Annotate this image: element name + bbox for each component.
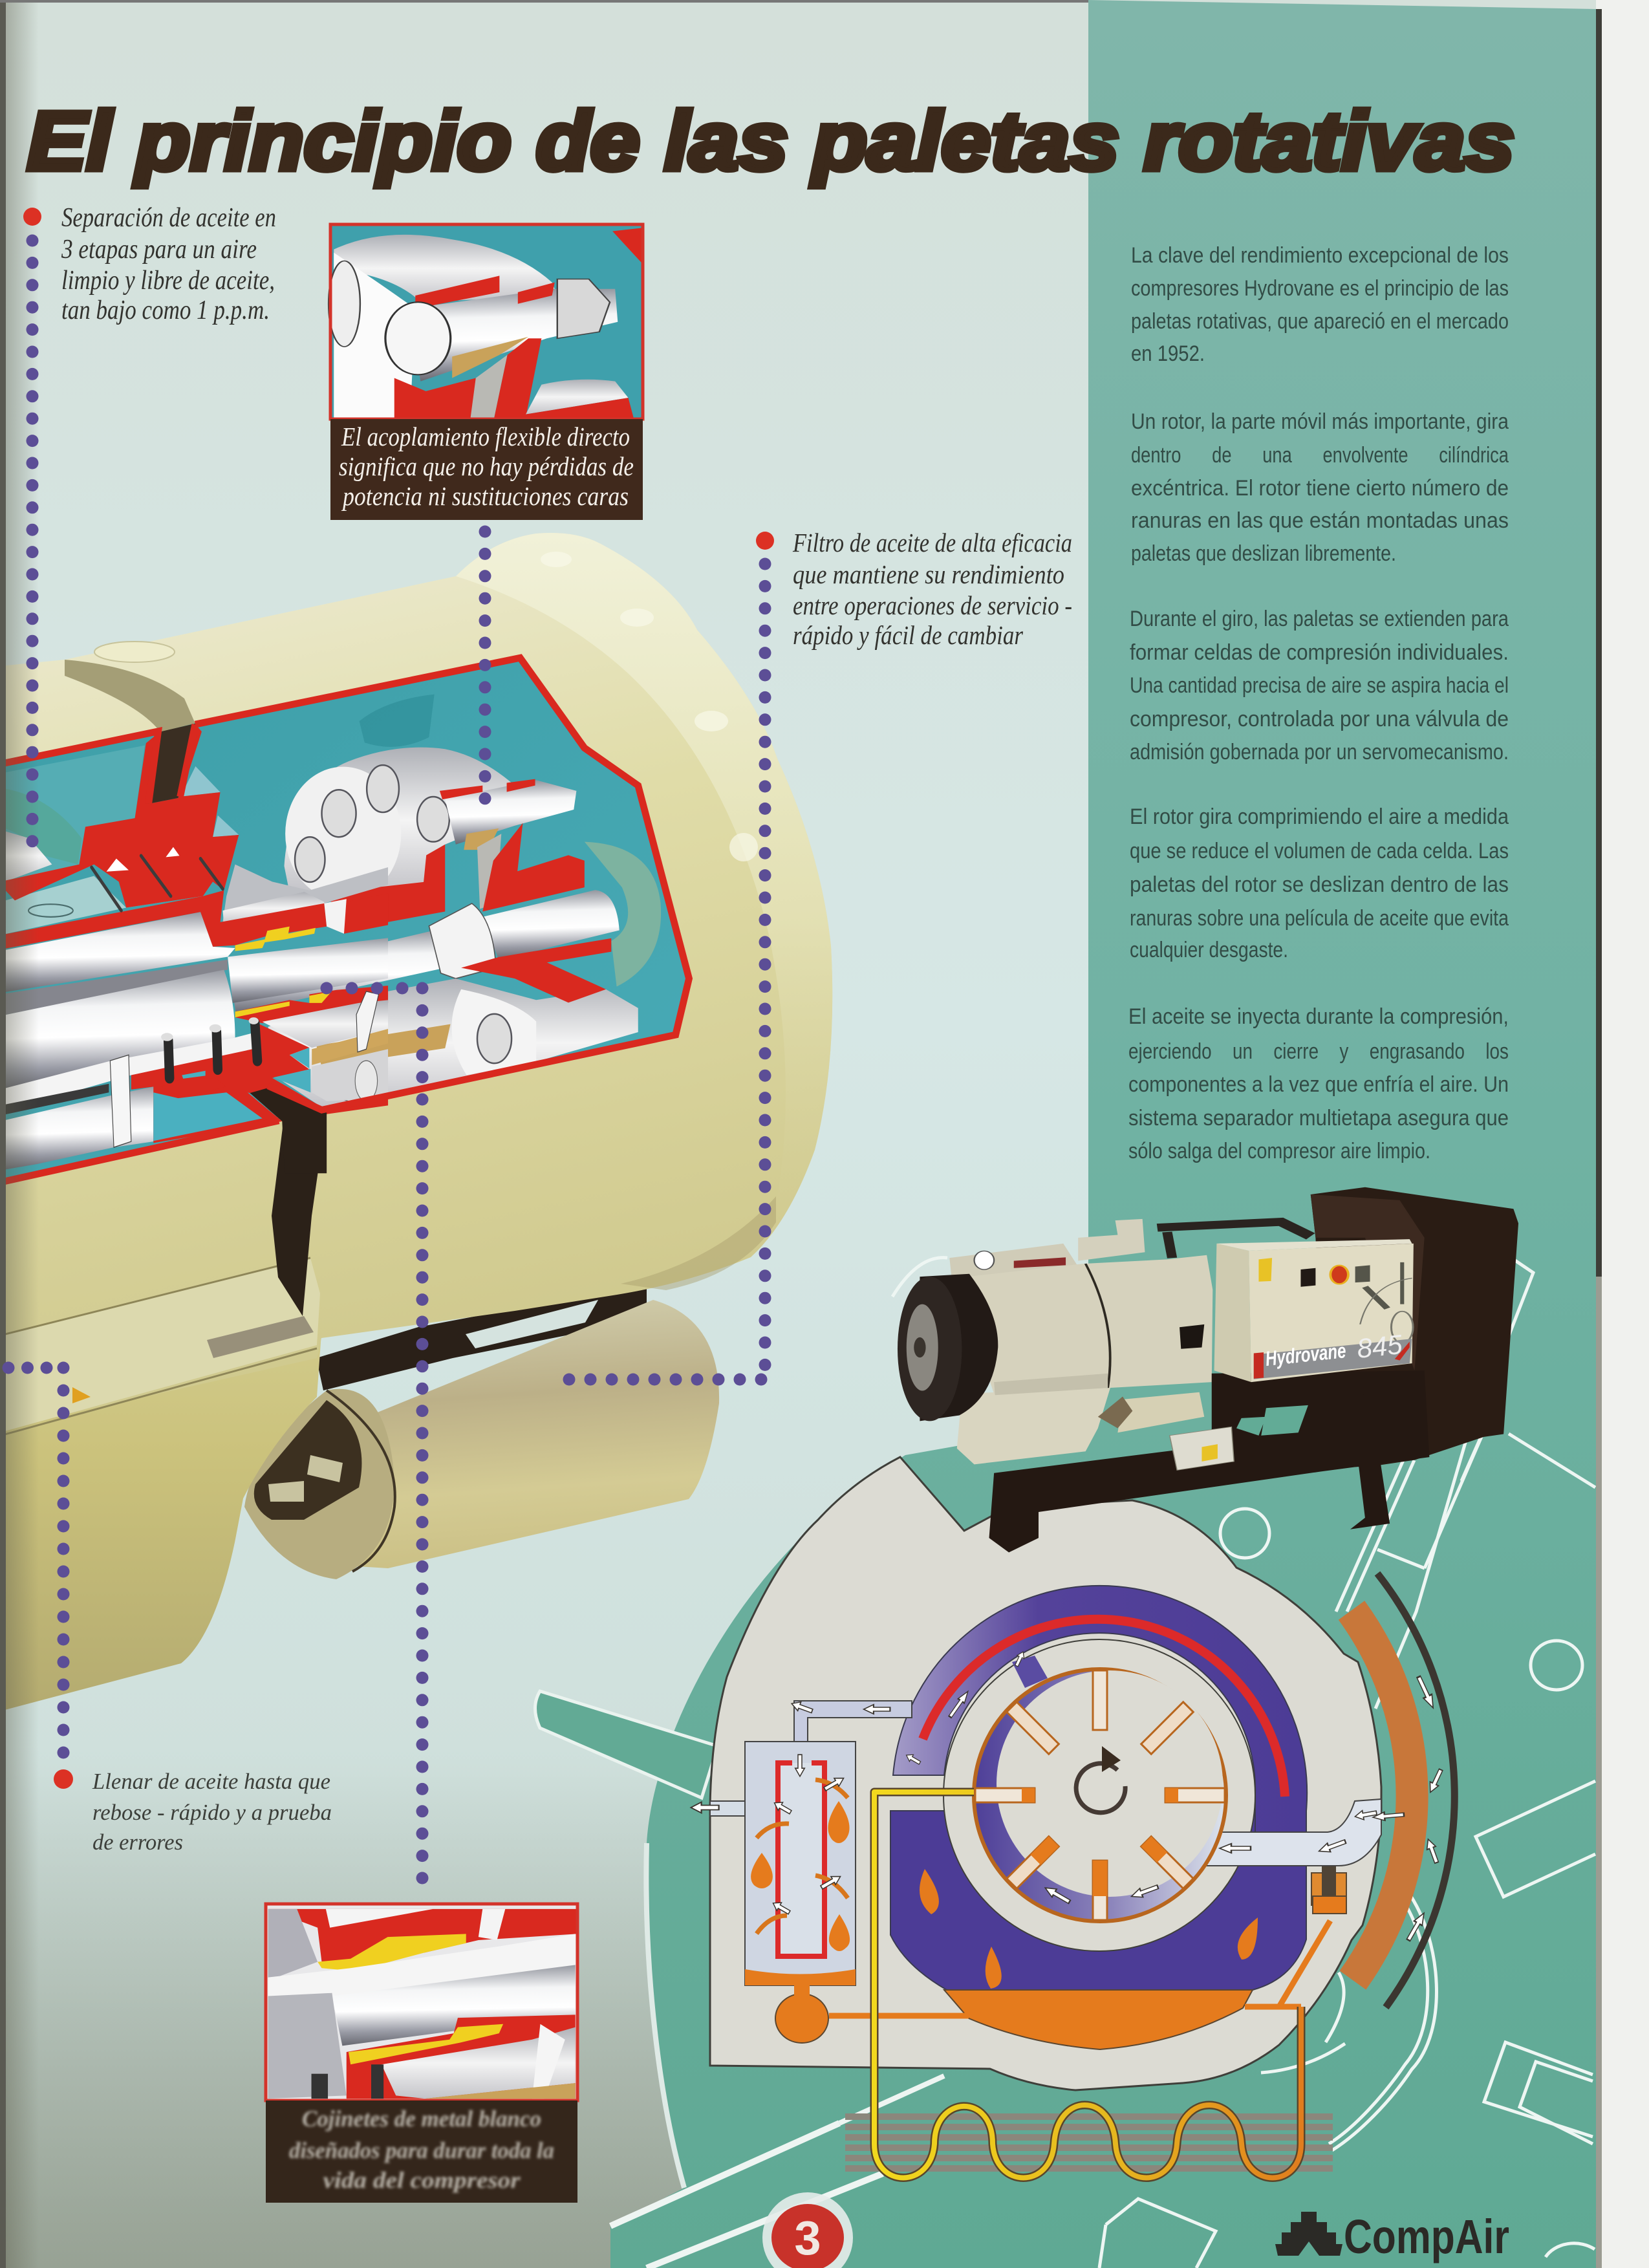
inlet pipe	[1199, 1799, 1381, 1866]
gauge panel	[949, 1244, 1078, 1281]
big shafts	[0, 912, 235, 993]
separator vessel	[710, 1701, 912, 2043]
callout: oil separation: 3 etapas para un aire	[61, 235, 257, 265]
body text: Un rotor, la parte móvil más importante, gira	[1131, 409, 1509, 434]
cooler fins	[845, 2113, 1333, 2172]
callout: oil separation: Separación de aceite en	[61, 203, 276, 233]
callout: oil filling	[54, 1769, 332, 1855]
body text: ranuras sobre una película de aceite que evita	[1130, 906, 1509, 931]
panel: white metal bearings detail: diseñados para durar toda la	[289, 2137, 554, 2163]
brand label text: Hydrovane	[1264, 1339, 1347, 1370]
callout: oil filling: rebose - rápido y a prueba	[92, 1800, 332, 1825]
callout: oil filter: que mantiene su rendimiento	[793, 559, 1064, 589]
lower tank	[957, 1388, 1110, 1464]
callout: oil filter: entre operaciones de servicio -	[793, 590, 1072, 620]
main body	[0, 533, 832, 1429]
radiator	[1311, 1187, 1518, 1469]
callout: oil separation: limpio y libre de aceite,	[61, 266, 275, 296]
black filter pad	[609, 978, 721, 1103]
body text: componentes a la vez que enfría el aire. Un	[1128, 1072, 1509, 1097]
flange head	[284, 748, 536, 892]
oil filter	[1311, 1866, 1346, 1914]
callout: oil filling: Llenar de aceite hasta que	[92, 1769, 330, 1794]
page number	[762, 2192, 853, 2268]
illustration: cutaway compressor housing	[0, 533, 832, 1711]
body text: sólo salga del compresor aire limpio.	[1128, 1139, 1430, 1163]
body text: paletas rotativas, que apareció en el mercado	[1131, 309, 1509, 334]
lower strips	[0, 1032, 257, 1112]
body text: dentro de una envolvente cilíndrica	[1131, 443, 1509, 468]
air/oil ring	[890, 1586, 1307, 1990]
lower tank	[0, 1196, 323, 1711]
central red block	[0, 724, 239, 908]
outer orange band	[1352, 1610, 1412, 1980]
page number: 3	[794, 2211, 821, 2265]
body text: El rotor gira comprimiendo el aire a medida	[1130, 805, 1509, 829]
teal text panel	[1088, 0, 1596, 2268]
cutaway interior: left chamber and main shafts	[0, 724, 388, 1173]
callout: oil filter: Filtro de aceite de alta eficacia	[792, 528, 1072, 557]
callout: oil separation: tan bajo como 1 p.p.m.	[61, 296, 270, 325]
base frame	[989, 1370, 1429, 1552]
body text: La clave del rendimiento excepcional de los	[1131, 243, 1509, 268]
compressor unit photo	[898, 1187, 1518, 1552]
shafts	[231, 930, 445, 1013]
body text: ejerciendo un cierre y engrasando los	[1128, 1039, 1509, 1064]
oil circuit diagram	[691, 1457, 1454, 2178]
red section outline	[0, 658, 689, 1182]
panel: white metal bearings detail: Cojinetes de metal blanco	[302, 2106, 541, 2132]
oil drops	[751, 1801, 1258, 1989]
small oil filter cylinder	[244, 1287, 719, 1579]
body text: excéntrica. El rotor tiene cierto número de	[1131, 476, 1509, 501]
lower coupling	[268, 978, 638, 1107]
oil return lines	[829, 1921, 1330, 2016]
rotor	[974, 1669, 1226, 1921]
oil sump	[944, 1990, 1253, 2049]
cutaway interior: right chamber	[0, 658, 689, 1182]
body text: compresor, controlada por una válvula de	[1130, 707, 1509, 731]
panel: flexible coupling detail: El acoplamiento flexible directo	[341, 422, 630, 451]
flange highlight	[456, 533, 832, 1235]
flow arrows	[691, 1650, 1445, 1942]
panel: flexible coupling detail: potencia ni sustituciones caras	[341, 481, 629, 511]
motor body	[954, 1255, 1212, 1394]
body text: ranuras en las que están montadas unas	[1131, 508, 1509, 533]
panel: flexible coupling detail	[329, 224, 643, 520]
callout: oil filter	[756, 528, 1072, 650]
body text: compresores Hydrovane es el principio de las	[1131, 276, 1509, 301]
body text: en 1952.	[1131, 341, 1205, 366]
flywheel	[920, 1274, 998, 1421]
pipe	[1158, 1222, 1311, 1237]
dotted leader lines	[8, 241, 765, 1896]
body text: Durante el giro, las paletas se extienden para	[1130, 607, 1509, 631]
bottom page shading	[0, 1746, 1088, 2268]
seam band on tank	[0, 1258, 320, 1432]
section seams	[149, 724, 195, 804]
body text: sistema separador multietapa asegura que	[1128, 1106, 1509, 1130]
right page margin	[1596, 0, 1649, 2268]
lower dark seam	[272, 1112, 327, 1316]
title: El principio de las paletas rotativas	[27, 95, 1514, 188]
body text: Una cantidad precisa de aire se aspira hacia el	[1130, 673, 1509, 698]
housing	[710, 1457, 1381, 2090]
panel: white metal bearings detail	[266, 1904, 577, 2203]
outer black band	[1377, 1573, 1454, 2007]
CompAir logo	[1275, 2210, 1509, 2263]
warning box	[1170, 1427, 1234, 1470]
compressor unit photo: 845	[1355, 1329, 1404, 1364]
coupling	[445, 780, 576, 845]
body text: que se reduce el volumen de cada celda. Las	[1130, 839, 1509, 863]
CompAir logo: CompAir	[1344, 2210, 1509, 2263]
panel: white metal bearings detail: vida del compresor	[323, 2167, 521, 2193]
callout: oil separation	[23, 203, 276, 325]
body text: paletas del rotor se deslizan dentro de las	[1130, 872, 1509, 897]
background: teal gear disc and white line pattern	[535, 1258, 1595, 2268]
cooling coil	[874, 1792, 1301, 2178]
panel: flexible coupling detail: significa que no hay pérdidas de	[339, 451, 634, 481]
callout: oil filter: rápido y fácil de cambiar	[793, 620, 1024, 650]
body text: formar celdas de compresión individuales.	[1130, 640, 1509, 665]
callout: oil filling: de errores	[92, 1830, 183, 1855]
body text: admisión gobernada por un servomecanismo.	[1130, 740, 1509, 764]
top seam	[65, 660, 195, 734]
control box	[1214, 1244, 1251, 1382]
oil cylinder	[1117, 1392, 1204, 1432]
body text: El aceite se inyecta durante la compresión,	[1128, 1004, 1509, 1029]
body text: paletas que deslizan libremente.	[1131, 541, 1396, 566]
red castings	[327, 845, 445, 930]
body text: cualquier desgaste.	[1130, 938, 1288, 962]
body text	[1128, 243, 1509, 1163]
